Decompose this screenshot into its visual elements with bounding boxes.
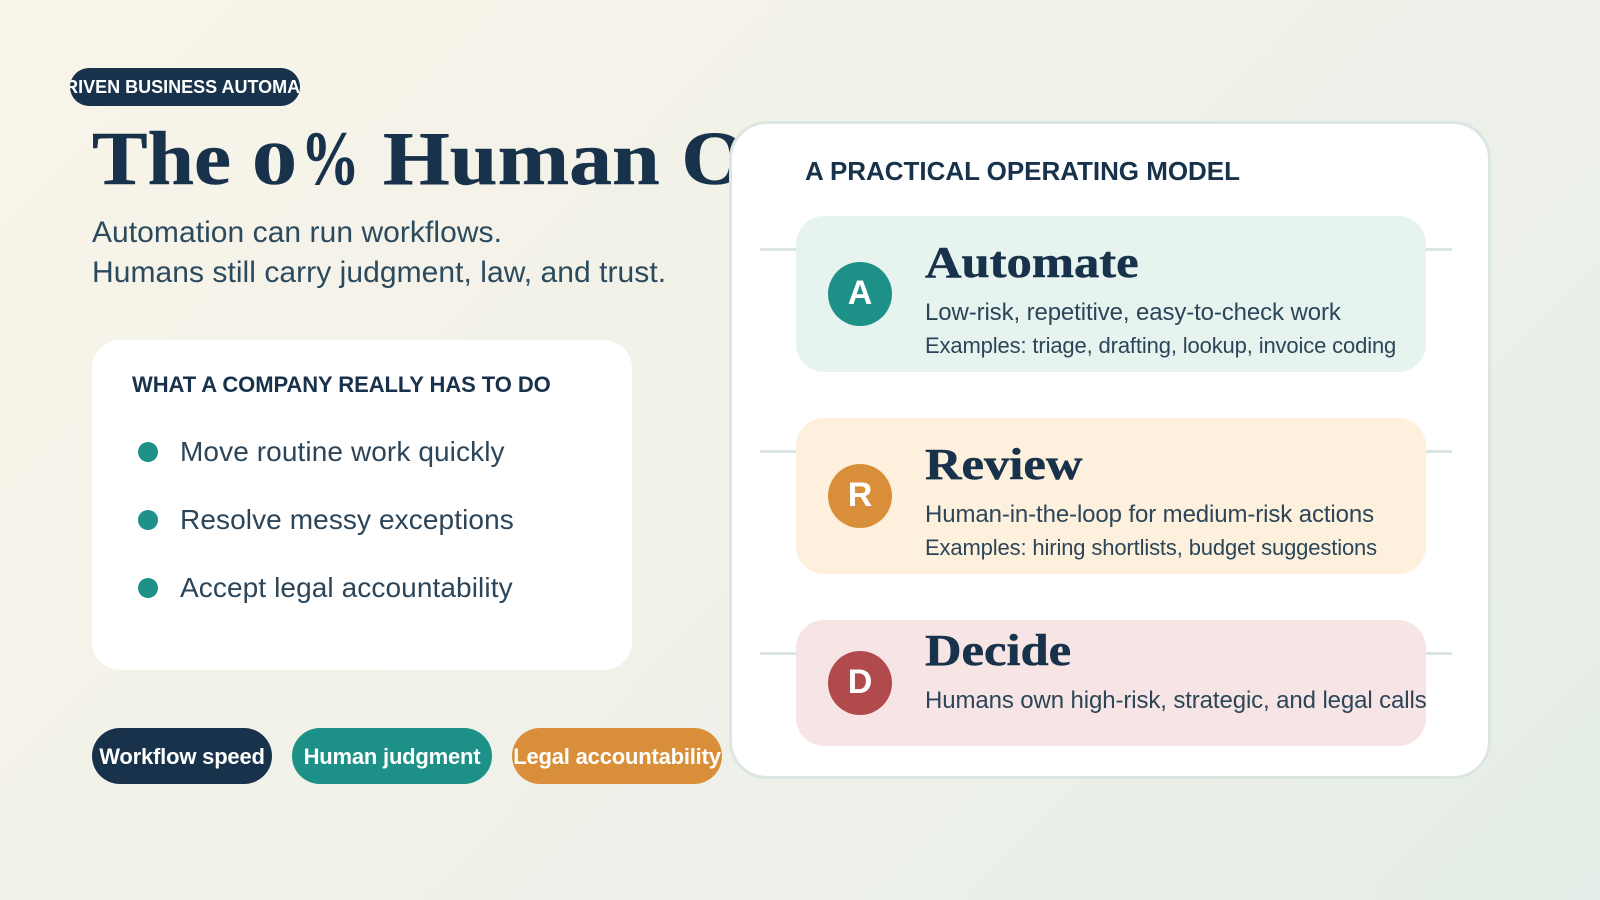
panel: what a company has to do — [92, 340, 632, 670]
subtitle: Humans still carry judgment, law, and trust. — [92, 256, 666, 289]
card heading: Review — [925, 440, 1082, 489]
connector line D — [760, 652, 1452, 655]
pill: human judgment — [292, 728, 492, 784]
subtitle: Automation can run workflows. — [92, 216, 502, 249]
card description: Human-in-the-loop for medium-risk actions — [925, 501, 1374, 528]
icon: D: D — [848, 663, 872, 701]
panel heading: WHAT A COMPANY REALLY HAS TO DO — [132, 372, 551, 397]
title: The — [92, 117, 231, 201]
pill: legal accountability — [512, 728, 722, 784]
card: decide — [796, 620, 1426, 746]
card description: Humans own high-risk, strategic, and legal calls — [925, 687, 1427, 714]
card heading: Automate — [925, 238, 1139, 287]
panel heading: operating model: A PRACTICAL OPERATING MODEL — [805, 156, 1240, 186]
list item: accountability: Accept legal accountability — [180, 572, 513, 603]
pill: workflow speed — [92, 728, 272, 784]
icon: R: R — [848, 476, 872, 514]
card examples: Examples: triage, drafting, lookup, invoice coding — [925, 333, 1396, 358]
card examples: Examples: hiring shortlists, budget suggestions — [925, 535, 1377, 560]
connector line R — [760, 450, 1452, 453]
card: review — [796, 418, 1426, 574]
list item: exceptions: Resolve messy exceptions — [180, 504, 514, 535]
pill: human judgment: Human judgment — [304, 744, 480, 769]
badge — [70, 68, 300, 106]
title: % — [301, 117, 360, 201]
title: Human Org — [383, 117, 829, 201]
card: automate — [796, 216, 1426, 372]
pill: workflow speed: Workflow speed — [99, 744, 265, 769]
pill: legal accountability: Legal accountability — [513, 744, 721, 769]
icon: D — [828, 651, 892, 715]
icon: A — [828, 262, 892, 326]
icon: A: A — [848, 274, 872, 312]
icon: R — [828, 464, 892, 528]
title — [92, 117, 829, 201]
card description: Low-risk, repetitive, easy-to-check work — [925, 299, 1341, 326]
panel: practical operating model — [729, 121, 1491, 779]
card heading: Decide — [925, 626, 1071, 675]
subtitle — [92, 216, 666, 289]
title: 0 — [252, 131, 297, 197]
list item: routine work: Move routine work quickly — [180, 436, 505, 467]
connector line A — [760, 248, 1452, 251]
